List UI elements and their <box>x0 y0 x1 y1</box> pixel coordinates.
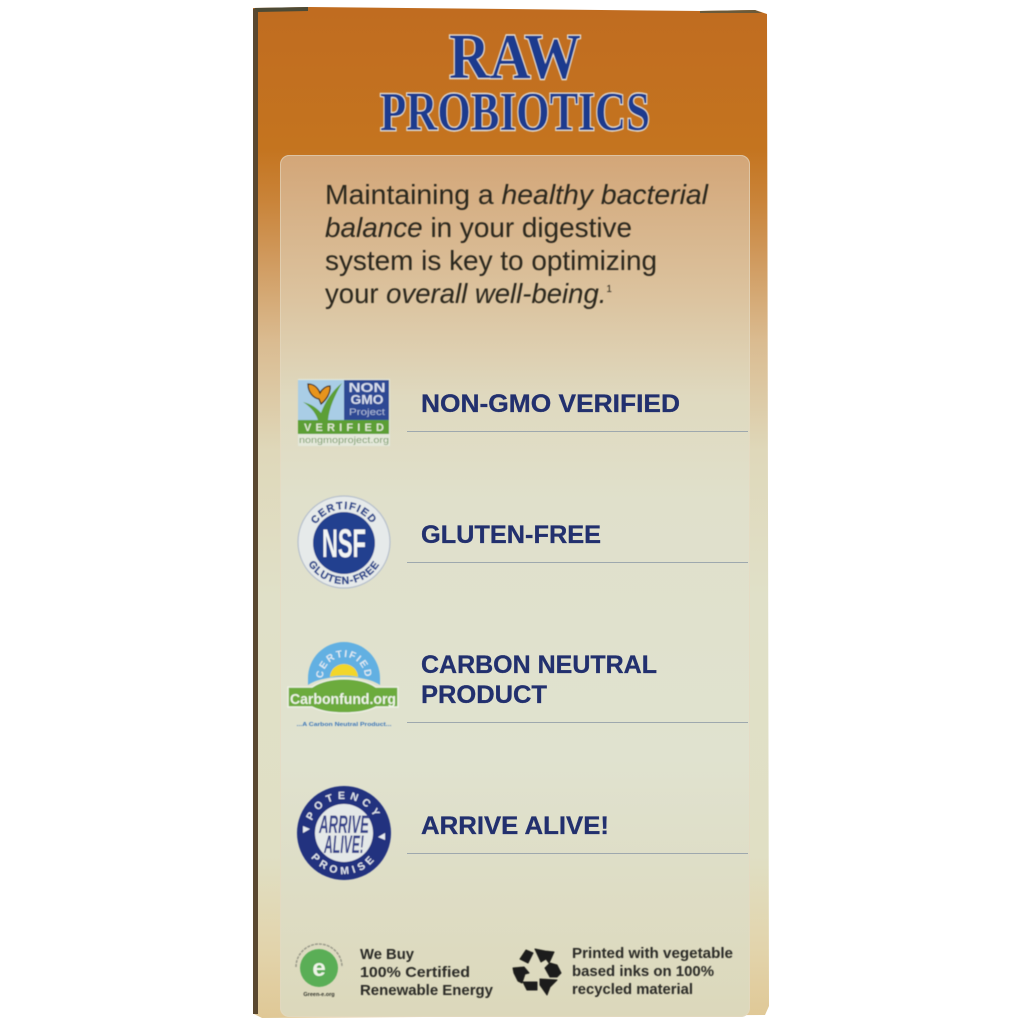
icon: NSF certified gluten-free seal: NSF <box>322 522 366 566</box>
icon: Arrive Alive potency promise seal: ALIVE! <box>324 831 364 859</box>
label: carbon neutral product: PRODUCT <box>421 681 547 709</box>
icon: Carbonfund certified logo: Carbonfund.org <box>290 692 396 708</box>
icon: Non-GMO Project badge: VERIFIED <box>304 422 384 434</box>
icon: Arrive Alive potency promise seal: PROMISE <box>310 852 375 876</box>
icon: Arrive Alive potency promise seal: POTENCY <box>305 790 381 821</box>
icon: Green-e energy logo: e <box>312 955 326 982</box>
label: carbon neutral product <box>407 651 748 723</box>
text: printed with vegetable inks: Printed with vegetable <box>572 945 733 962</box>
intro text: 1 <box>606 284 612 295</box>
panel <box>280 155 750 1017</box>
icon: Carbonfund certified logo: CERTIFIED <box>316 650 372 678</box>
icon: Arrive Alive potency promise seal <box>296 785 392 881</box>
icon: Non-GMO Project badge <box>298 379 390 446</box>
text: renewable energy: Renewable Energy <box>360 982 494 999</box>
icon: Green-e energy logo <box>296 944 342 998</box>
intro text: your overall well-being. <box>325 278 606 309</box>
product box background <box>253 7 769 1018</box>
icon: NSF certified gluten-free seal <box>297 495 391 589</box>
label: carbon neutral product: CARBON NEUTRAL <box>421 651 657 679</box>
icon: NSF certified gluten-free seal: CERTIFIED <box>310 501 376 524</box>
icon: Non-GMO Project badge: NON <box>348 381 386 395</box>
icon: Non-GMO Project badge: nongmoproject.org <box>299 435 389 445</box>
icon: Arrive Alive potency promise seal: ARRIVE <box>318 811 370 839</box>
intro text: Maintaining a healthy bacterial <box>325 179 709 210</box>
text: renewable energy: 100% Certified <box>360 964 470 981</box>
title <box>380 21 650 142</box>
label: arrive alive: ARRIVE ALIVE! <box>421 812 609 840</box>
icon: NSF certified gluten-free seal: GLUTEN-FREE <box>308 560 380 585</box>
intro text: system is key to optimizing <box>325 245 657 276</box>
icon: Carbonfund certified logo <box>287 641 399 728</box>
icon: Green-e energy logo: Green-e.org <box>303 992 335 998</box>
icon: Non-GMO Project badge: Project <box>349 407 386 417</box>
text: renewable energy: We Buy <box>360 946 415 963</box>
text: printed with vegetable inks: based inks on 100% <box>572 963 714 980</box>
title: PROBIOTICS <box>380 81 650 142</box>
intro text: balance in your digestive <box>325 212 632 243</box>
label: Non-GMO verified: NON-GMO VERIFIED <box>421 390 680 418</box>
text: printed with vegetable inks: recycled material <box>572 981 693 998</box>
title: RAW <box>449 21 581 93</box>
icon: recycling symbol <box>513 949 561 995</box>
label: gluten-free: GLUTEN-FREE <box>421 521 601 549</box>
text: renewable energy <box>360 946 494 999</box>
icon: Non-GMO Project badge: GMO <box>350 393 384 407</box>
icon: Carbonfund certified logo: ...A Carbon Neutral Product... <box>296 722 392 728</box>
intro text <box>325 179 709 309</box>
text: printed with vegetable inks <box>572 945 733 998</box>
